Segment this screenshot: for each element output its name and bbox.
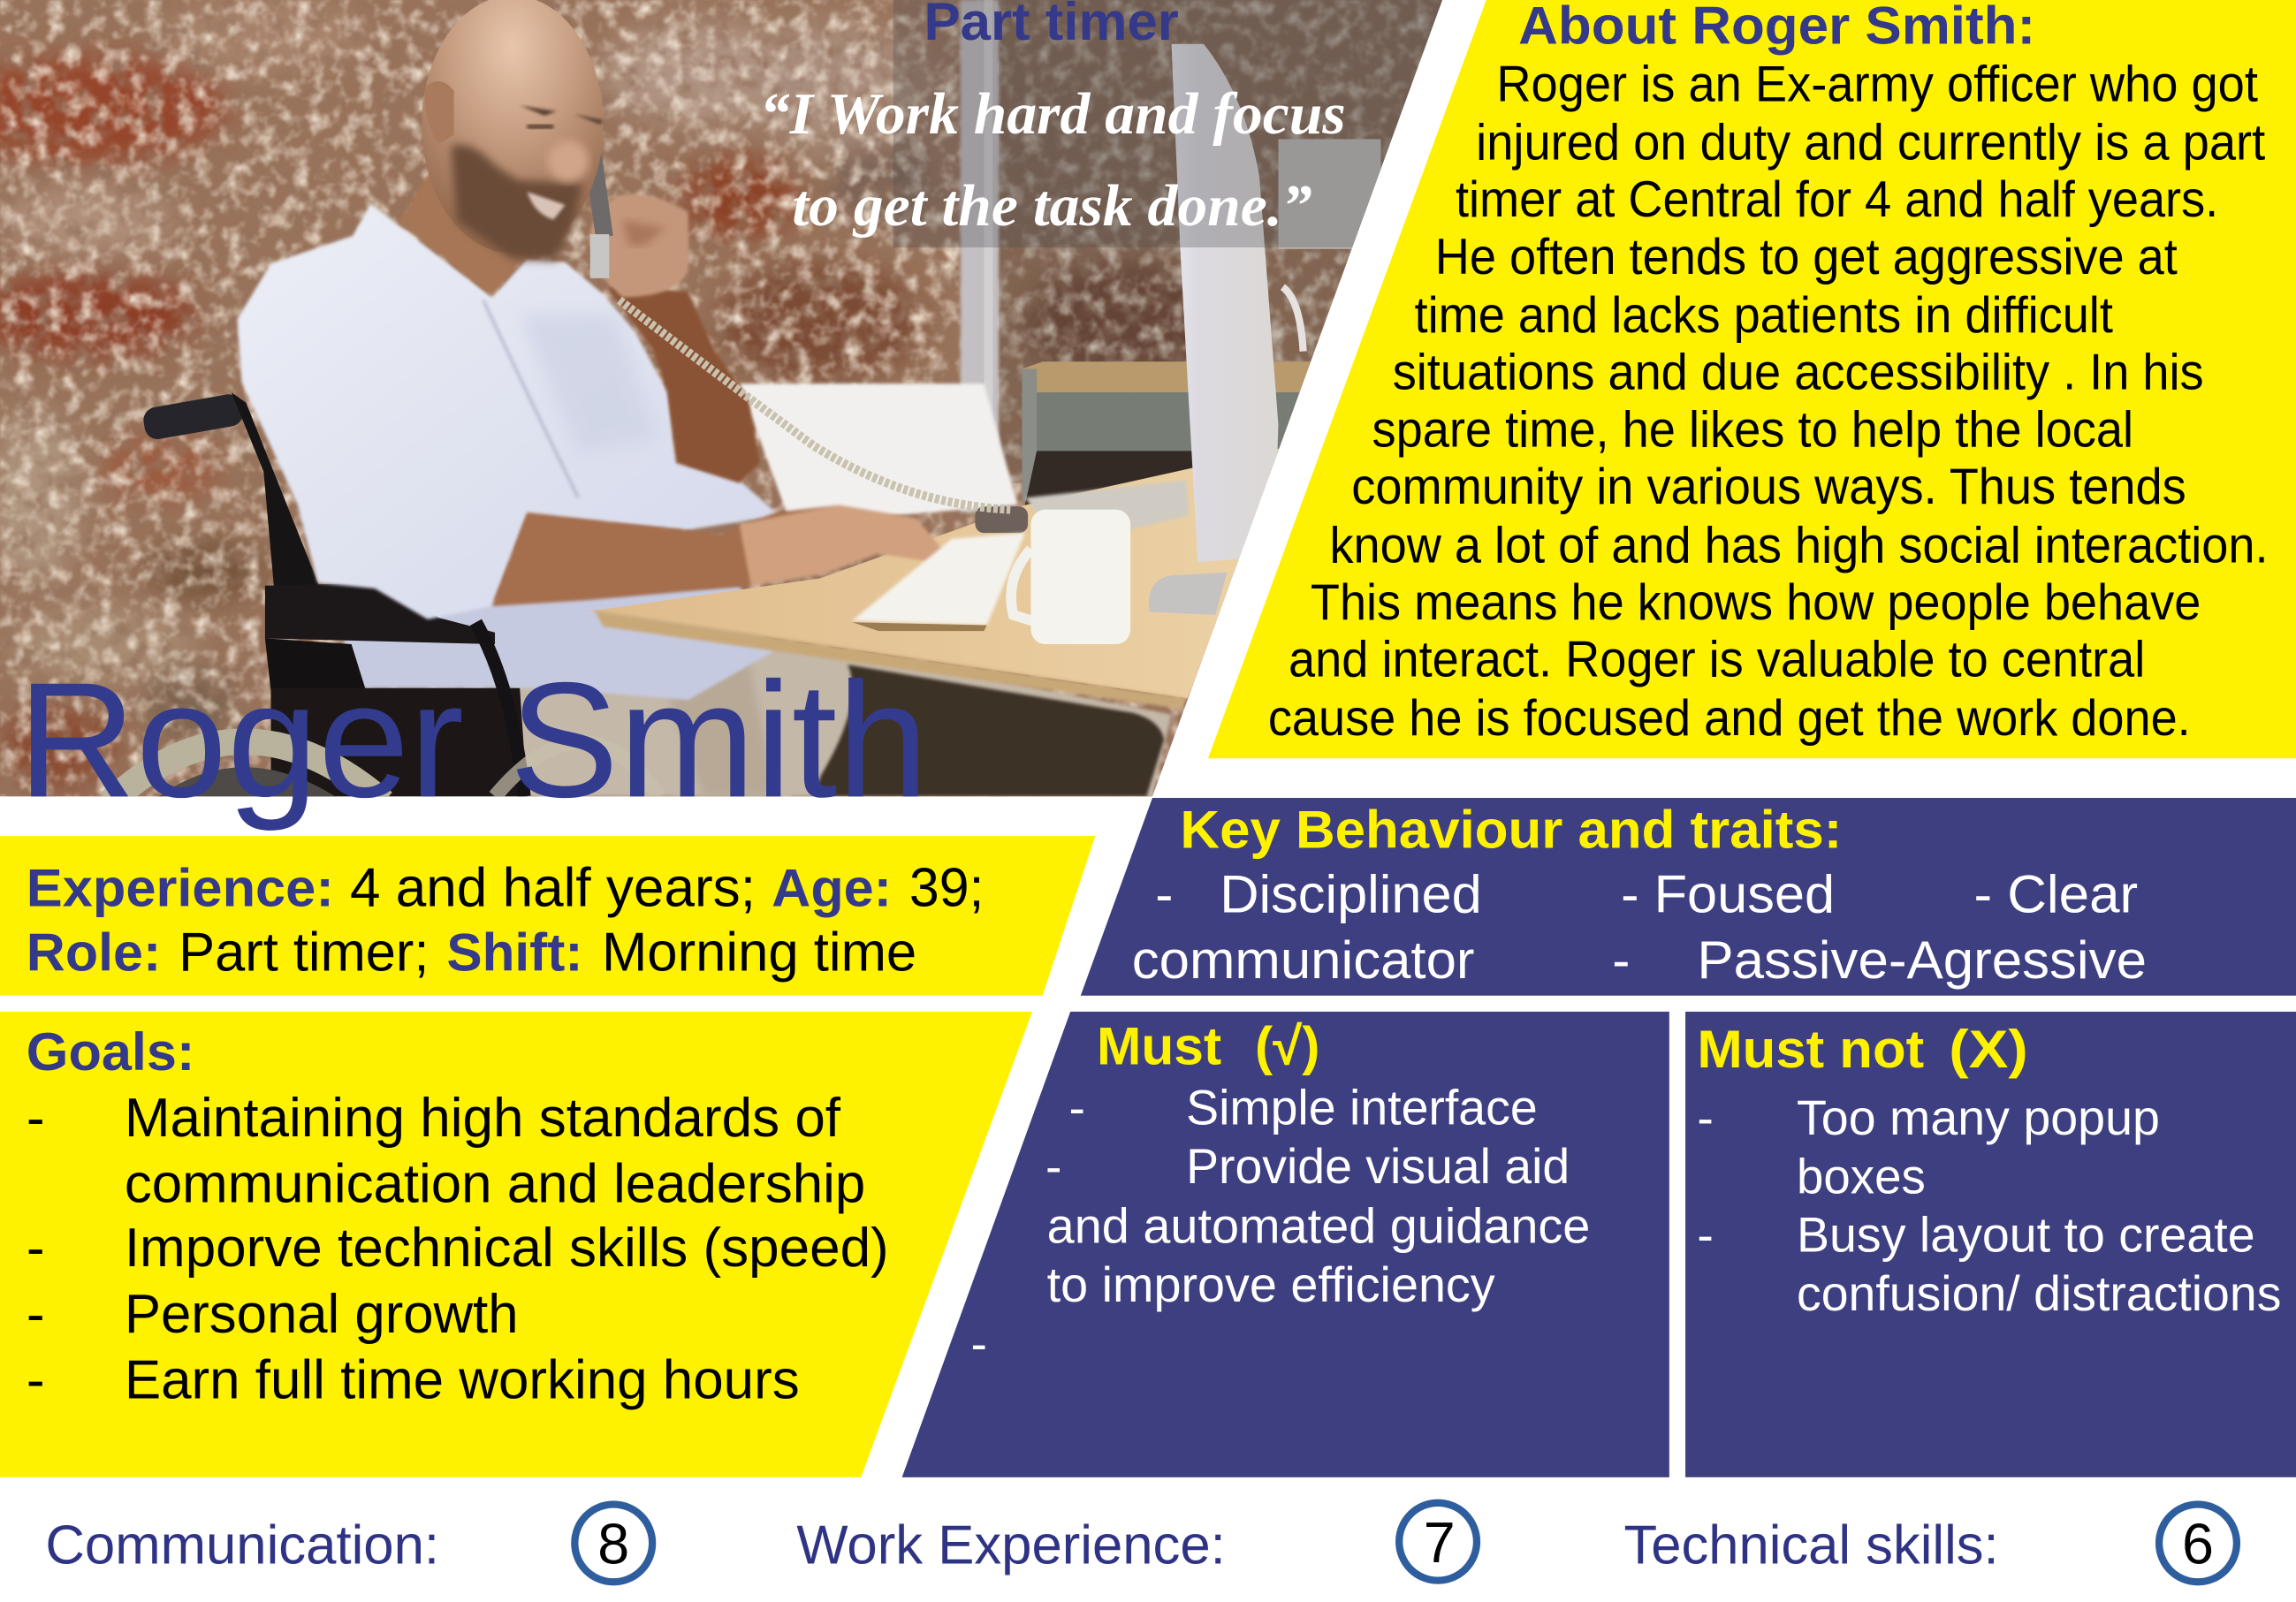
about body text: know a lot of and has high social interaction. [1329,517,2269,573]
brick wall background [0,0,1449,798]
about body text: He often tends to get aggressive at [1435,229,2178,285]
about body text: Roger is an Ex-army officer who got [1496,56,2258,112]
must heading: (√) [1255,1016,1319,1076]
must list: - [1045,1139,1062,1194]
panel: experience, age, role, shift: Shift: [446,922,582,983]
must not list: Busy layout to create [1797,1208,2255,1263]
rating: technical skills 6 [1623,1504,2237,1582]
goals heading: Goals: [27,1021,194,1082]
goals list: - [27,1349,45,1410]
panel: experience, age, role, shift: 39; [909,858,984,919]
neck, head and beard [399,0,604,296]
rating: work experience 7 [796,1503,1477,1581]
must not heading: Must not [1697,1019,1924,1079]
panel: must [902,1012,1669,1477]
must heading: Must [1097,1016,1221,1076]
back keyboard and mouse [975,480,1189,533]
traits list: - [1612,930,1630,990]
grey quote overlay band [893,0,1442,247]
quote: to get the task done.” [792,174,1312,239]
white paper on desk [740,383,1018,524]
rating: work experience 7: Work Experience: [796,1515,1226,1576]
panel: experience, age, role, shift: Role: [27,922,161,983]
must not list: - [1697,1090,1714,1145]
about body text [1268,56,2269,747]
panel: experience, age, role, shift: Experience: [27,858,334,918]
monitor [1149,44,1278,615]
coiled telephone cord [620,300,1010,510]
quote: “I Work hard and focus [760,82,1346,147]
must list [971,1081,1590,1370]
panel: goals [0,1012,1032,1477]
goals list: communication and leadership [125,1153,865,1214]
panel: must not [1685,1012,2296,1477]
desk top [586,446,1289,709]
traits list: communicator [1132,930,1474,990]
quote [760,82,1346,239]
traits list: Passive-Agressive [1697,930,2147,990]
about body text: injured on duty and currently is a part [1476,115,2265,171]
must list: - [971,1316,987,1370]
must not heading: (X) [1949,1019,2028,1079]
must list: - [1069,1081,1085,1135]
coffee mug [1011,510,1130,644]
panel: experience, age, role, shift: Part timer; [179,922,429,983]
traits list [1132,863,2147,990]
name heading: Roger Smith: Roger Smith [18,649,928,831]
panel: About Roger Smith [1208,0,2296,758]
traits list: Disciplined [1220,863,1482,923]
must list: Provide visual aid [1186,1139,1570,1194]
about body text: community in various ways. Thus tends [1351,459,2186,515]
rating: work experience 7: 7 [1424,1511,1456,1575]
panel: experience, age, role, shift: 4 and half years; [350,858,756,919]
panel: experience, age, role, shift [0,836,1095,996]
glass partition and background office [961,0,1453,512]
must not list: confusion/ distractions [1797,1266,2281,1321]
must not heading [1697,1019,2028,1079]
goals list: Personal growth [125,1284,519,1345]
wheelchair [110,392,659,802]
about body text: cause he is focused and get the work done. [1268,690,2191,747]
rating: technical skills 6: 6 [2182,1513,2214,1576]
goals list: Imporve technical skills (speed) [125,1218,889,1279]
goals list: Maintaining high standards of [125,1088,841,1149]
about body text: This means he knows how people behave [1311,574,2201,631]
about body text: and interact. Roger is valuable to central [1289,631,2145,687]
photo: man in wheelchair on telephone at desk [0,0,1453,802]
shirt [237,203,779,619]
must not list [1697,1090,2281,1321]
about body text: time and lacks patients in difficult [1415,287,2113,344]
panel: experience, age, role, shift: Age: [772,858,892,918]
must list: to improve efficiency [1047,1257,1495,1312]
panel: experience, age, role, shift: Morning time [602,922,916,983]
goals list: - [27,1284,45,1345]
must not list: boxes [1797,1149,1926,1203]
key behaviour heading: Key Behaviour and traits: [1180,799,1842,859]
goals list: Earn full time working hours [125,1349,800,1410]
must list: and automated guidance [1047,1199,1590,1254]
about body text: timer at Central for 4 and half years. [1456,171,2218,228]
goals list: - [27,1218,45,1279]
must list: Simple interface [1186,1081,1538,1135]
panel: key behaviour and traits [1081,798,2296,996]
traits list: - Clear [1973,863,2138,923]
about body text: spare time, he likes to help the local [1372,401,2133,458]
goals list [27,1088,889,1410]
lower body and trousers [344,586,1172,796]
raised forearm and hand with phone [584,156,760,483]
traits list: - [1155,863,1173,923]
must not list: - [1697,1208,1714,1263]
rating: technical skills 6: Technical skills: [1623,1515,1999,1576]
rating: communication 8: 8 [597,1513,629,1576]
traits list: - Foused [1621,863,1835,923]
must not list: Too many popup [1797,1090,2160,1145]
about body text: situations and due accessibility . In his [1393,345,2204,401]
forearm and hand on keyboard [492,505,954,606]
rating: communication 8 [45,1504,652,1582]
goals list: - [27,1088,45,1149]
rating: communication 8: Communication: [45,1515,439,1576]
keyboard [852,533,1025,631]
